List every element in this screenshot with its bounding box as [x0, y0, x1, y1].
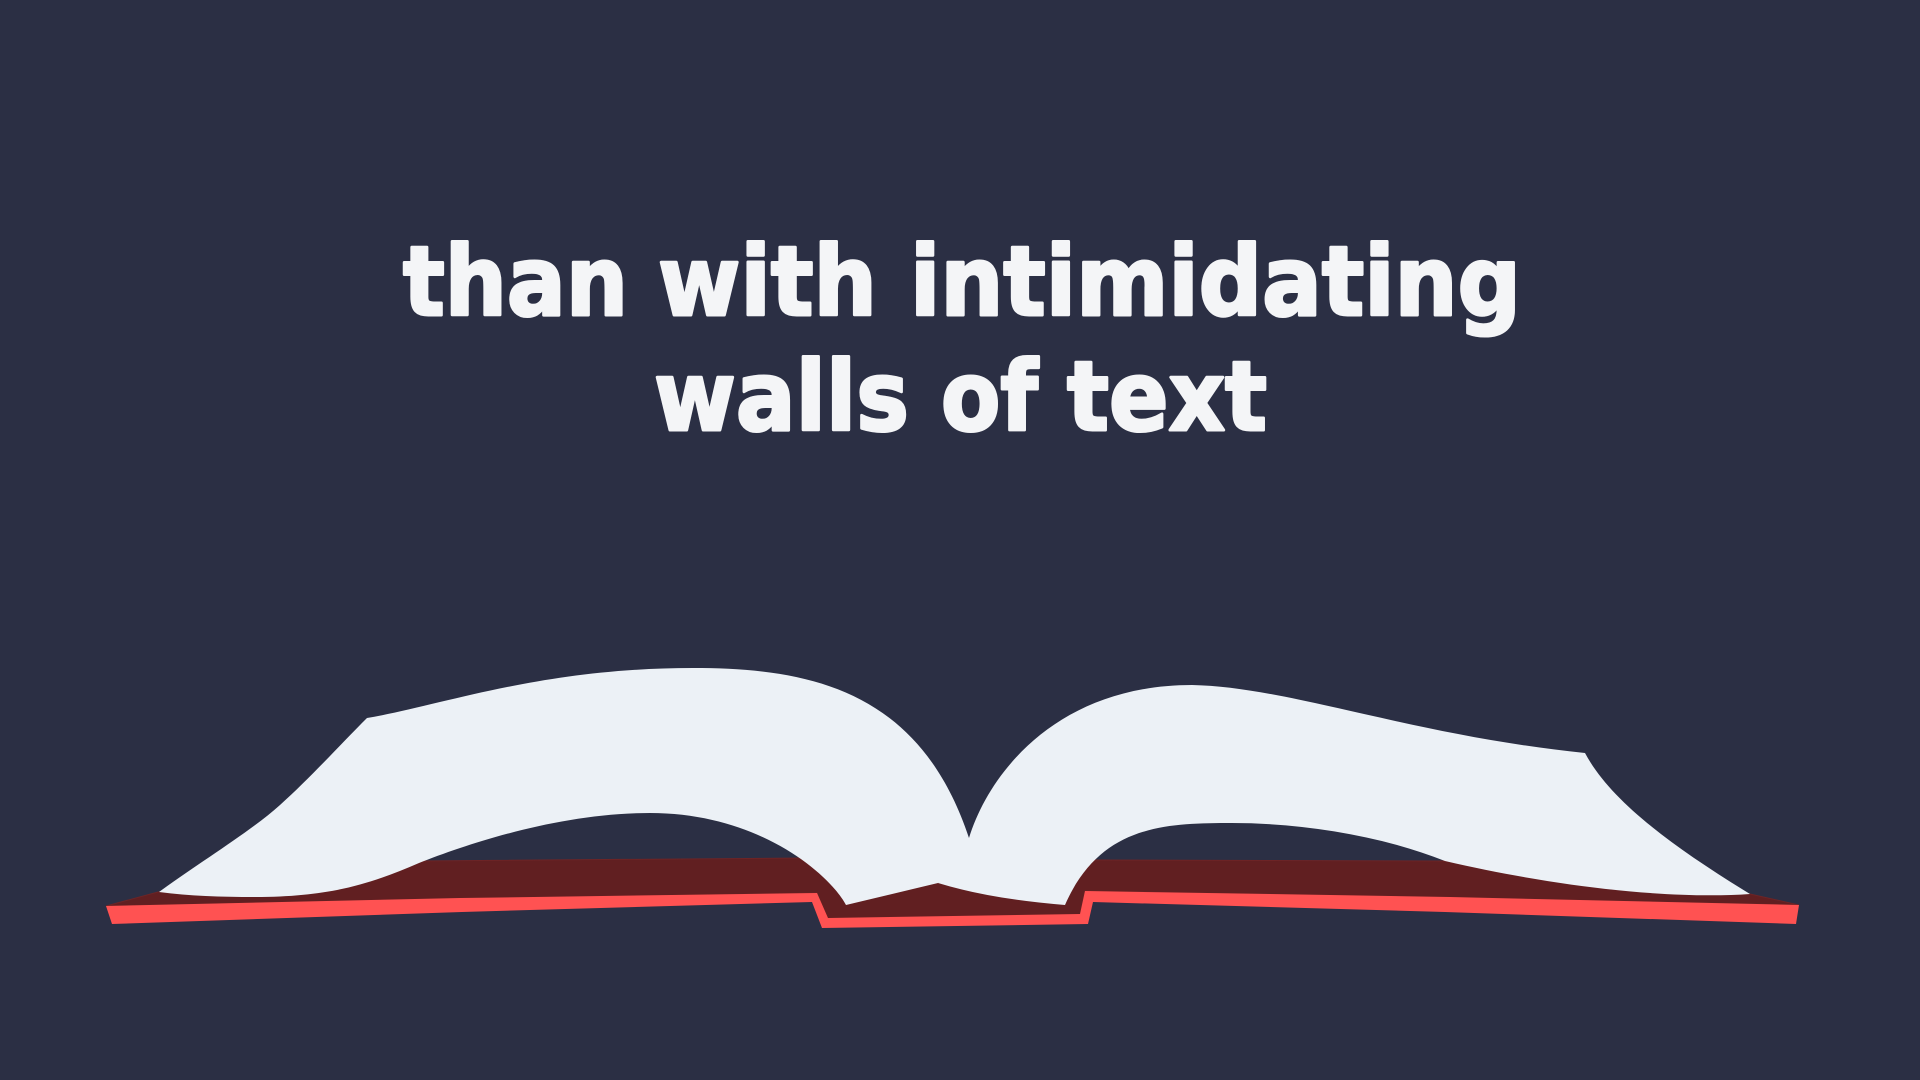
- illustration: open book: [106, 668, 1799, 928]
- title line 2: text: [1067, 341, 1267, 453]
- title line 2: [654, 341, 1267, 453]
- title line 2: of: [941, 341, 1039, 453]
- title line 1: than: [403, 226, 628, 338]
- title line 2: walls: [654, 341, 909, 453]
- title: [403, 226, 1521, 453]
- left page: [159, 668, 985, 905]
- book cover inside: [106, 858, 1799, 920]
- title line 1: intimidating: [910, 226, 1521, 338]
- title line 1: with: [658, 226, 877, 338]
- right page: [938, 685, 1750, 905]
- title line 1: [403, 226, 1521, 338]
- book cover edge: [106, 891, 1799, 928]
